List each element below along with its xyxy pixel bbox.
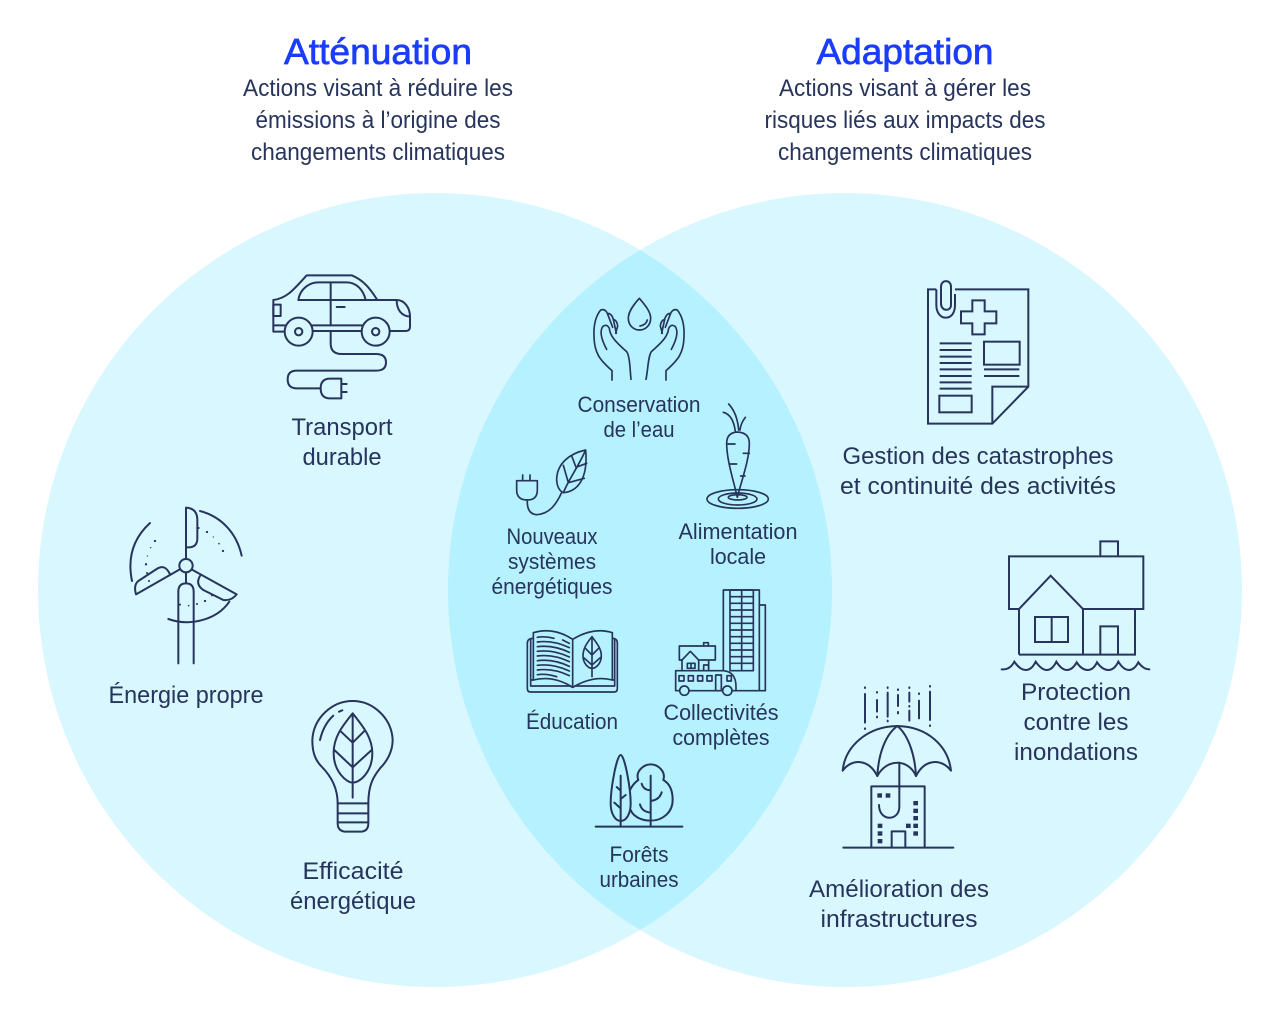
label: Gestion des catastrophes [840,443,1116,500]
icon: electric car [273,275,410,398]
heading: Atténuation: Actions visant à réduire les [243,75,513,102]
icon: carrot [707,404,768,508]
label: Efficacité énergétique: Efficacité [302,858,404,885]
label: Alimentation locale: locale [710,544,766,569]
label: Nouveaux systèmes énergétiques: systèmes [508,549,596,574]
label: Collectivités complètes: Collectivités [664,700,778,725]
label: Transport durable: Transport [292,414,393,441]
label: Protection contre les inondations [1014,679,1138,766]
label: Transport durable [292,414,393,471]
icon: hands and water drop [594,298,684,380]
label: Forêts urbaines: Forêts [610,842,668,867]
icon: complete community [676,590,765,695]
icon: leaf light bulb [312,701,393,832]
label: Amélioration des infrastructures: infrastructures [820,906,978,933]
heading: Atténuation: Atténuation [284,31,472,72]
label: Gestion des catastrophes: Gestion des catastrophes [842,443,1114,470]
icon: flooded house [1002,541,1149,670]
label: Amélioration des infrastructures: Amélioration des [809,876,989,903]
label: Énergie propre: Énergie propre [108,682,264,709]
label: Conservation de l'eau [578,392,700,442]
label: Alimentation locale [678,519,798,569]
label: Nouveaux systèmes énergétiques: Nouveaux [506,524,598,549]
icon: medical document [928,281,1028,424]
label: Forêts urbaines [600,842,678,892]
heading: Atténuation [243,31,513,166]
label: Conservation de l'eau: Conservation [578,392,700,417]
icon: open book [527,631,617,692]
label: Collectivités complètes: complètes [672,725,770,750]
circle: mitigation [38,193,832,987]
label: Conservation de l'eau: de l’eau [604,417,674,442]
label: Protection contre les inondations: Protection [1021,679,1131,706]
heading: Adaptation: Actions visant à gérer les [779,75,1031,102]
label: Protection contre les inondations: inondations [1014,739,1138,766]
heading: Atténuation: changements climatiques [251,139,505,166]
label: Nouveaux systèmes énergétiques [492,524,612,599]
label: Collectivités complètes [664,700,778,750]
heading: Adaptation [764,31,1046,166]
label: Efficacité énergétique [290,858,416,915]
label: Éducation: Éducation [526,709,618,734]
label: Transport durable: durable [302,444,382,471]
label: Protection contre les inondations: contre les [1024,709,1128,736]
label: Alimentation locale: Alimentation [678,519,798,544]
label: Efficacité énergétique: énergétique [290,888,416,915]
heading: Atténuation: émissions à l’origine des [256,107,500,134]
overlap: both strategies [448,250,832,930]
label: Nouveaux systèmes énergétiques: énergétiques [492,574,612,599]
heading: Adaptation: Adaptation [816,31,994,72]
icon: wind turbine [130,508,242,663]
heading: Adaptation: risques liés aux impacts des [764,107,1046,134]
icon: plug and leaf [517,450,587,515]
icon: umbrella over building [843,686,953,848]
label: Amélioration des infrastructures [809,876,989,933]
label: Forêts urbaines: urbaines [600,867,678,892]
icon: urban trees [596,755,682,827]
heading: Adaptation: changements climatiques [778,139,1032,166]
circle: adaptation [448,193,1242,987]
label: Gestion des catastrophes: et continuité des activités [840,473,1116,500]
